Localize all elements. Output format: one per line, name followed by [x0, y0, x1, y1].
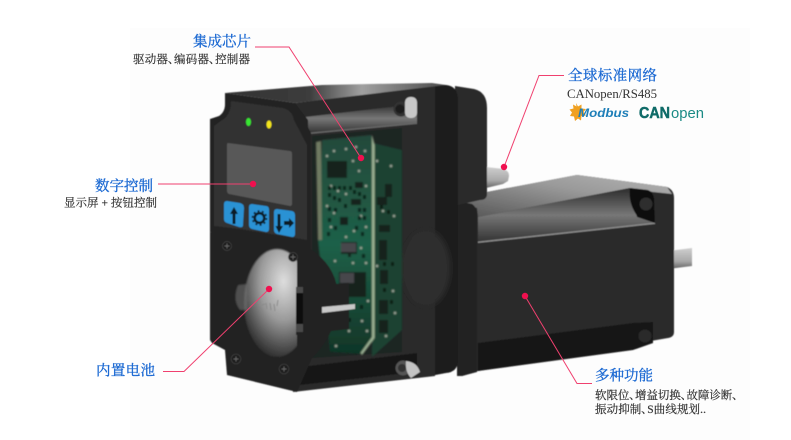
callout: multiple functions — [522, 293, 738, 416]
description: protocols: CANopen/RS485 — [567, 87, 657, 101]
upper screw — [394, 97, 417, 118]
upper groove — [296, 104, 417, 133]
logo: Modbus: Modbus — [578, 106, 629, 120]
description: function list line 1: 软限位、增益切换、故障诊断、 — [595, 388, 738, 402]
control circuit boards — [316, 135, 402, 357]
logo: CANopen: open — [671, 105, 704, 122]
flange — [430, 85, 458, 376]
button up — [224, 201, 244, 227]
front control panel — [210, 93, 310, 250]
status led yellow — [266, 120, 272, 128]
lower screw — [396, 360, 420, 378]
drive housing front corner — [295, 103, 311, 392]
heading: multiple functions: 多种功能 — [595, 368, 653, 384]
callout: digital control — [64, 178, 256, 210]
transparent window shade — [312, 128, 402, 358]
callout: integrated chip — [133, 32, 364, 161]
heading: integrated chip: 集成芯片 — [193, 32, 251, 50]
background panel — [130, 28, 750, 440]
marker dot: global standard network — [501, 164, 507, 170]
output shaft — [672, 248, 692, 268]
description: digital control: 显示屏 + 按钮控制 — [64, 196, 157, 210]
housing top face — [225, 83, 446, 103]
status led green — [246, 118, 251, 126]
battery clip — [235, 284, 247, 310]
leader line: multiple functions — [525, 296, 592, 384]
leader line: global standard network — [504, 76, 564, 167]
heading: built-in battery: 内置电池 — [96, 362, 156, 380]
description: integrated chip: 驱动器、编码器、控制器 — [133, 52, 250, 66]
lower groove — [300, 353, 417, 385]
coin battery — [244, 248, 298, 357]
upper groove edge — [310, 122, 417, 134]
leader line: integrated chip — [255, 47, 361, 158]
battery holder — [210, 232, 338, 392]
leader line: built-in battery — [163, 289, 269, 372]
display screen — [227, 143, 292, 206]
logo mark: star — [570, 103, 586, 121]
callout: built-in battery — [96, 286, 272, 380]
rear end block — [455, 86, 487, 205]
marker dot: multiple functions — [522, 293, 528, 299]
logo: Modbus — [570, 103, 629, 121]
logo: CANopen — [639, 105, 704, 122]
circuit components — [327, 161, 392, 333]
stepper motor body — [457, 175, 674, 376]
battery connector — [296, 283, 355, 335]
marker dot: built-in battery — [266, 286, 272, 292]
heading: global standard network: 全球标准网络 — [568, 68, 658, 84]
marker dot: integrated chip — [358, 155, 364, 161]
battery embossed marks — [258, 300, 278, 311]
button direction — [274, 209, 295, 237]
logo: CANopen: CAN — [639, 105, 670, 122]
panel screws — [222, 242, 298, 374]
rear shaft — [486, 167, 509, 188]
description: function list line 2: 振动抑制、S曲线规划.. — [595, 402, 706, 416]
marker dot: digital control — [250, 181, 256, 187]
leader line: digital control — [158, 183, 253, 185]
drive housing side — [293, 85, 435, 392]
motor product illustration — [210, 83, 692, 392]
button settings — [249, 204, 269, 232]
callout: global standard network — [501, 68, 704, 170]
ghost motor rotor — [402, 230, 450, 306]
heading: digital control: 数字控制 — [95, 178, 153, 195]
